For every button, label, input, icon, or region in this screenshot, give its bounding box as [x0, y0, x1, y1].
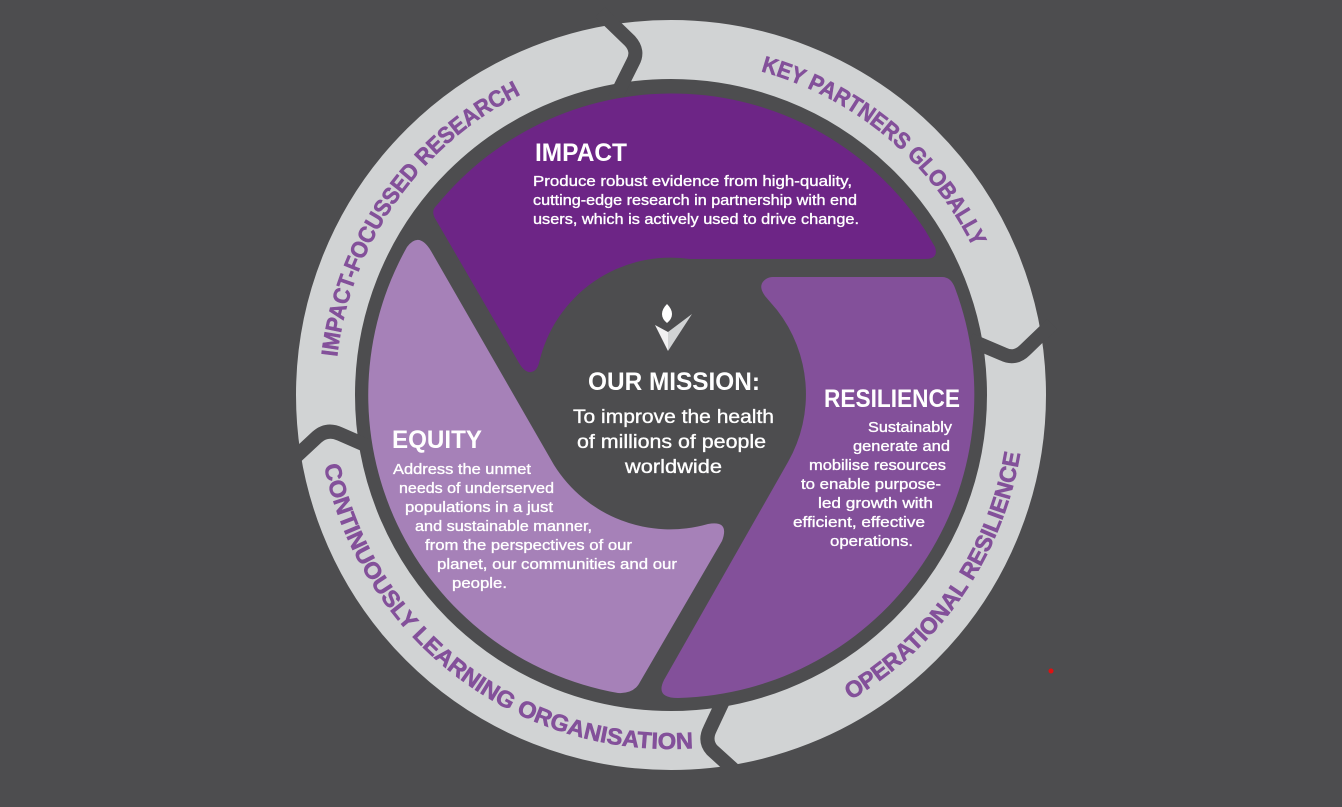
- panel: impact: [433, 93, 936, 372]
- text: impact description: [533, 173, 859, 228]
- text: resilience description: to enable purpose-: [801, 476, 941, 493]
- text: impact description: users, which is actively used to drive change.: [533, 211, 859, 228]
- text: equity description: needs of underserved: [399, 480, 554, 497]
- text: resilience description: Sustainably: [868, 419, 953, 436]
- text: equity description: planet, our communities and our: [437, 556, 677, 573]
- heading: impact: IMPACT: [535, 139, 627, 167]
- ring label: impact-focussed research: IMPACT-FOCUSSED RESEARCH: [321, 80, 520, 356]
- text: impact description: cutting-edge research in partnership with end: [533, 192, 857, 209]
- text: mission statement: [573, 407, 774, 478]
- text: equity description: from the perspectives of our: [425, 537, 632, 554]
- ring label: key partners globally: KEY PARTNERS GLOBALLY: [762, 56, 988, 243]
- text: resilience description: efficient, effective: [793, 514, 925, 531]
- text: resilience description: operations.: [830, 533, 913, 550]
- panel: resilience: [661, 277, 974, 698]
- text: mission statement: of millions of people: [577, 432, 766, 453]
- text: equity description: populations in a just: [405, 499, 554, 516]
- ring label: operational resilience: OPERATIONAL RESILIENCE: [846, 451, 1020, 698]
- panel: equity: [368, 240, 724, 693]
- text: equity description: and sustainable manner,: [415, 518, 592, 535]
- icon: logo with flame and check mark: [655, 304, 692, 351]
- text: impact description: Produce robust evidence from high-quality,: [533, 173, 852, 190]
- text: resilience description: [793, 419, 953, 550]
- red dot: [1048, 668, 1054, 674]
- ring label: continuously learning organisation: CONTINUOUSLY LEARNING ORGANISATION: [325, 464, 692, 750]
- heading: our mission: OUR MISSION:: [588, 368, 760, 396]
- text: resilience description: generate and: [853, 438, 950, 455]
- text: resilience description: led growth with: [818, 495, 933, 512]
- text: equity description: Address the unmet: [393, 461, 532, 478]
- text: mission statement: worldwide: [624, 457, 722, 478]
- text: equity description: people.: [452, 575, 507, 592]
- text: resilience description: mobilise resources: [809, 457, 946, 474]
- heading: resilience: RESILIENCE: [824, 385, 960, 413]
- text: equity description: [393, 461, 677, 592]
- text: mission statement: To improve the health: [573, 407, 774, 428]
- heading: equity: EQUITY: [392, 426, 482, 454]
- outer ring: [288, 12, 1052, 780]
